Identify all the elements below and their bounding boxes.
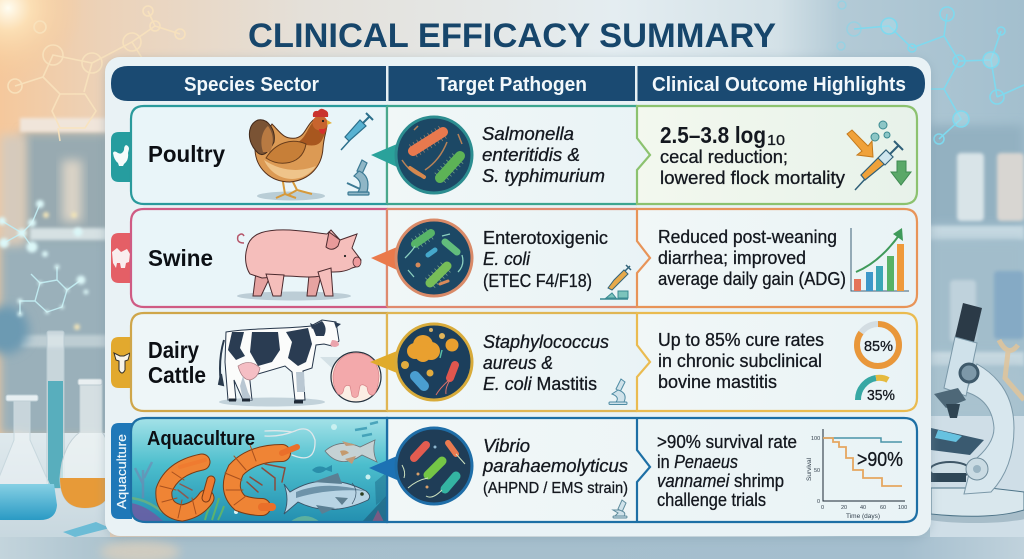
outcome text: dairy: bovine mastitis bbox=[658, 372, 777, 392]
pathogen text: poultry bbox=[482, 124, 605, 186]
gauge chart: 35% bbox=[858, 378, 895, 404]
icon: pig bbox=[237, 230, 361, 300]
survival chart: 100 bbox=[898, 505, 907, 511]
outcome text: aquaculture: >90% survival rate bbox=[657, 432, 797, 452]
pathogen text: aquaculture: Vibrio bbox=[483, 436, 530, 456]
survival chart: 100 bbox=[811, 436, 820, 442]
survival chart: 0 bbox=[817, 499, 820, 505]
outcome text: poultry bbox=[660, 122, 845, 188]
icon: bacteria swine bbox=[396, 220, 472, 296]
icon: top fish bbox=[325, 440, 377, 464]
icon: syringe with arrows bbox=[847, 121, 911, 190]
panel: summary table bbox=[105, 57, 931, 538]
pathogen text: aquaculture: parahaemolyticus bbox=[482, 456, 628, 476]
decoration: molecule top left bbox=[8, 6, 185, 141]
row frame: dairy cattle bbox=[131, 313, 917, 411]
pathogen text: dairy bbox=[483, 332, 609, 394]
icon: syringe bbox=[341, 113, 373, 150]
pathogen text: swine: (ETEC F4/F18) bbox=[483, 271, 592, 291]
survival chart: 40 bbox=[860, 505, 866, 511]
title: CLINICAL EFFICACY SUMMARY bbox=[248, 17, 776, 55]
gauge chart: 35%: 35% bbox=[867, 387, 895, 404]
pathogen text: poultry: enteritidis & bbox=[482, 145, 580, 165]
row frame: swine bbox=[131, 209, 917, 307]
icon: bacteria poultry bbox=[396, 117, 472, 193]
pathogen text: dairy: Staphylococcus bbox=[483, 332, 609, 352]
row frame: poultry bbox=[131, 106, 917, 204]
outcome text: dairy: in chronic subclinical bbox=[658, 351, 822, 371]
row tab: swine bbox=[111, 233, 131, 283]
outcome text: poultry: 10 bbox=[767, 132, 785, 149]
table header bar: Species Sector bbox=[184, 74, 319, 96]
icon: center shrimp bbox=[225, 429, 315, 507]
icon: udder detail bbox=[320, 352, 381, 402]
outcome text: dairy: Up to 85% cure rates bbox=[658, 330, 824, 350]
icon: chicken bbox=[249, 109, 332, 200]
bar chart: daily gain bbox=[851, 228, 909, 291]
icon: microscope bbox=[915, 303, 1024, 523]
icon: left shrimp bbox=[160, 460, 211, 518]
pointer: aquaculture bbox=[369, 456, 397, 480]
survival chart: Survival bbox=[806, 457, 813, 481]
pathogen text: poultry: Salmonella bbox=[482, 124, 574, 144]
survival chart: >90% bbox=[857, 449, 903, 471]
decoration: glowing molecule top right bbox=[837, 1, 1024, 144]
icon: bacteria aquaculture bbox=[396, 428, 472, 504]
survival chart: Time (days) bbox=[846, 513, 880, 520]
outcome text: aquaculture bbox=[657, 432, 797, 510]
pointer: swine bbox=[371, 247, 397, 270]
row: swine bbox=[111, 209, 917, 307]
pathogen text: swine: E. coli bbox=[483, 249, 531, 269]
pathogen text: dairy: aureus & bbox=[483, 353, 553, 373]
icon: microscope dairy bbox=[609, 379, 627, 404]
survival chart bbox=[806, 429, 907, 520]
label: Poultry: Poultry bbox=[148, 141, 225, 167]
row: aquaculture bbox=[111, 417, 917, 523]
row: poultry bbox=[111, 106, 917, 204]
row: dairy cattle bbox=[111, 313, 917, 411]
icon: dairy cow bbox=[219, 320, 341, 406]
table header bar: Target Pathogen bbox=[437, 74, 587, 96]
underwater scene with shrimp and fish bbox=[131, 418, 387, 522]
outcome text: aquaculture: vannamei shrimp bbox=[657, 471, 784, 491]
icon: microscope aquaculture bbox=[613, 500, 627, 518]
label: Dairy Cattle bbox=[148, 337, 206, 388]
outcome text: swine: Reduced post-weaning bbox=[658, 227, 837, 247]
icon: microscope small bbox=[347, 160, 369, 195]
survival chart: 20 bbox=[841, 505, 847, 511]
row tab: aquaculture: Aquaculture bbox=[114, 434, 129, 509]
outcome text: swine bbox=[658, 227, 846, 289]
survival chart: 60 bbox=[880, 505, 886, 511]
label: Aquaculture: Aquaculture bbox=[147, 428, 255, 450]
survival chart: 50 bbox=[814, 468, 820, 474]
pointer: dairy cattle bbox=[370, 351, 397, 373]
pathogen text: swine: Enterotoxigenic bbox=[483, 228, 608, 248]
pathogen text: dairy: E. coli Mastitis bbox=[483, 374, 597, 394]
pointer: poultry bbox=[371, 144, 397, 167]
donut chart: 85%: 85% bbox=[864, 338, 893, 355]
table header bar bbox=[111, 66, 925, 101]
icon: bottom fish bbox=[284, 473, 370, 514]
table header bar: Clinical Outcome Highlights bbox=[652, 74, 906, 96]
outcome text: poultry: lowered flock mortality bbox=[660, 168, 845, 188]
donut chart: 85% bbox=[857, 324, 899, 366]
outcome text: poultry: 2.5–3.8 log bbox=[660, 122, 766, 148]
pathogen text: poultry: S. typhimurium bbox=[482, 166, 605, 186]
label: Swine: Swine bbox=[148, 245, 213, 271]
row tab: dairy cattle bbox=[111, 337, 131, 388]
icon: lab glassware bbox=[0, 331, 112, 537]
icon: syringe and vials bbox=[600, 265, 631, 299]
outcome text: aquaculture: in Penaeus bbox=[657, 452, 738, 472]
label: Dairy Cattle: Cattle bbox=[148, 362, 206, 388]
row frame: aquaculture bbox=[387, 417, 917, 523]
row tab: poultry bbox=[111, 132, 131, 182]
row tab: aquaculture bbox=[111, 423, 132, 519]
pathogen text: aquaculture bbox=[482, 436, 628, 497]
decoration: glowing molecules left bbox=[0, 200, 88, 330]
pathogen text: swine bbox=[483, 228, 608, 291]
outcome text: aquaculture: challenge trials bbox=[657, 490, 766, 510]
survival chart: 0 bbox=[821, 505, 824, 511]
pathogen text: aquaculture: (AHPND / EMS strain) bbox=[483, 480, 628, 497]
outcome text: poultry: cecal reduction; bbox=[660, 147, 788, 167]
label: Dairy Cattle: Dairy bbox=[148, 337, 199, 363]
outcome text: swine: diarrhea; improved bbox=[658, 248, 806, 268]
outcome text: swine: average daily gain (ADG) bbox=[658, 269, 846, 289]
outcome text: dairy bbox=[658, 330, 824, 392]
icon: bacteria dairy bbox=[396, 324, 472, 400]
